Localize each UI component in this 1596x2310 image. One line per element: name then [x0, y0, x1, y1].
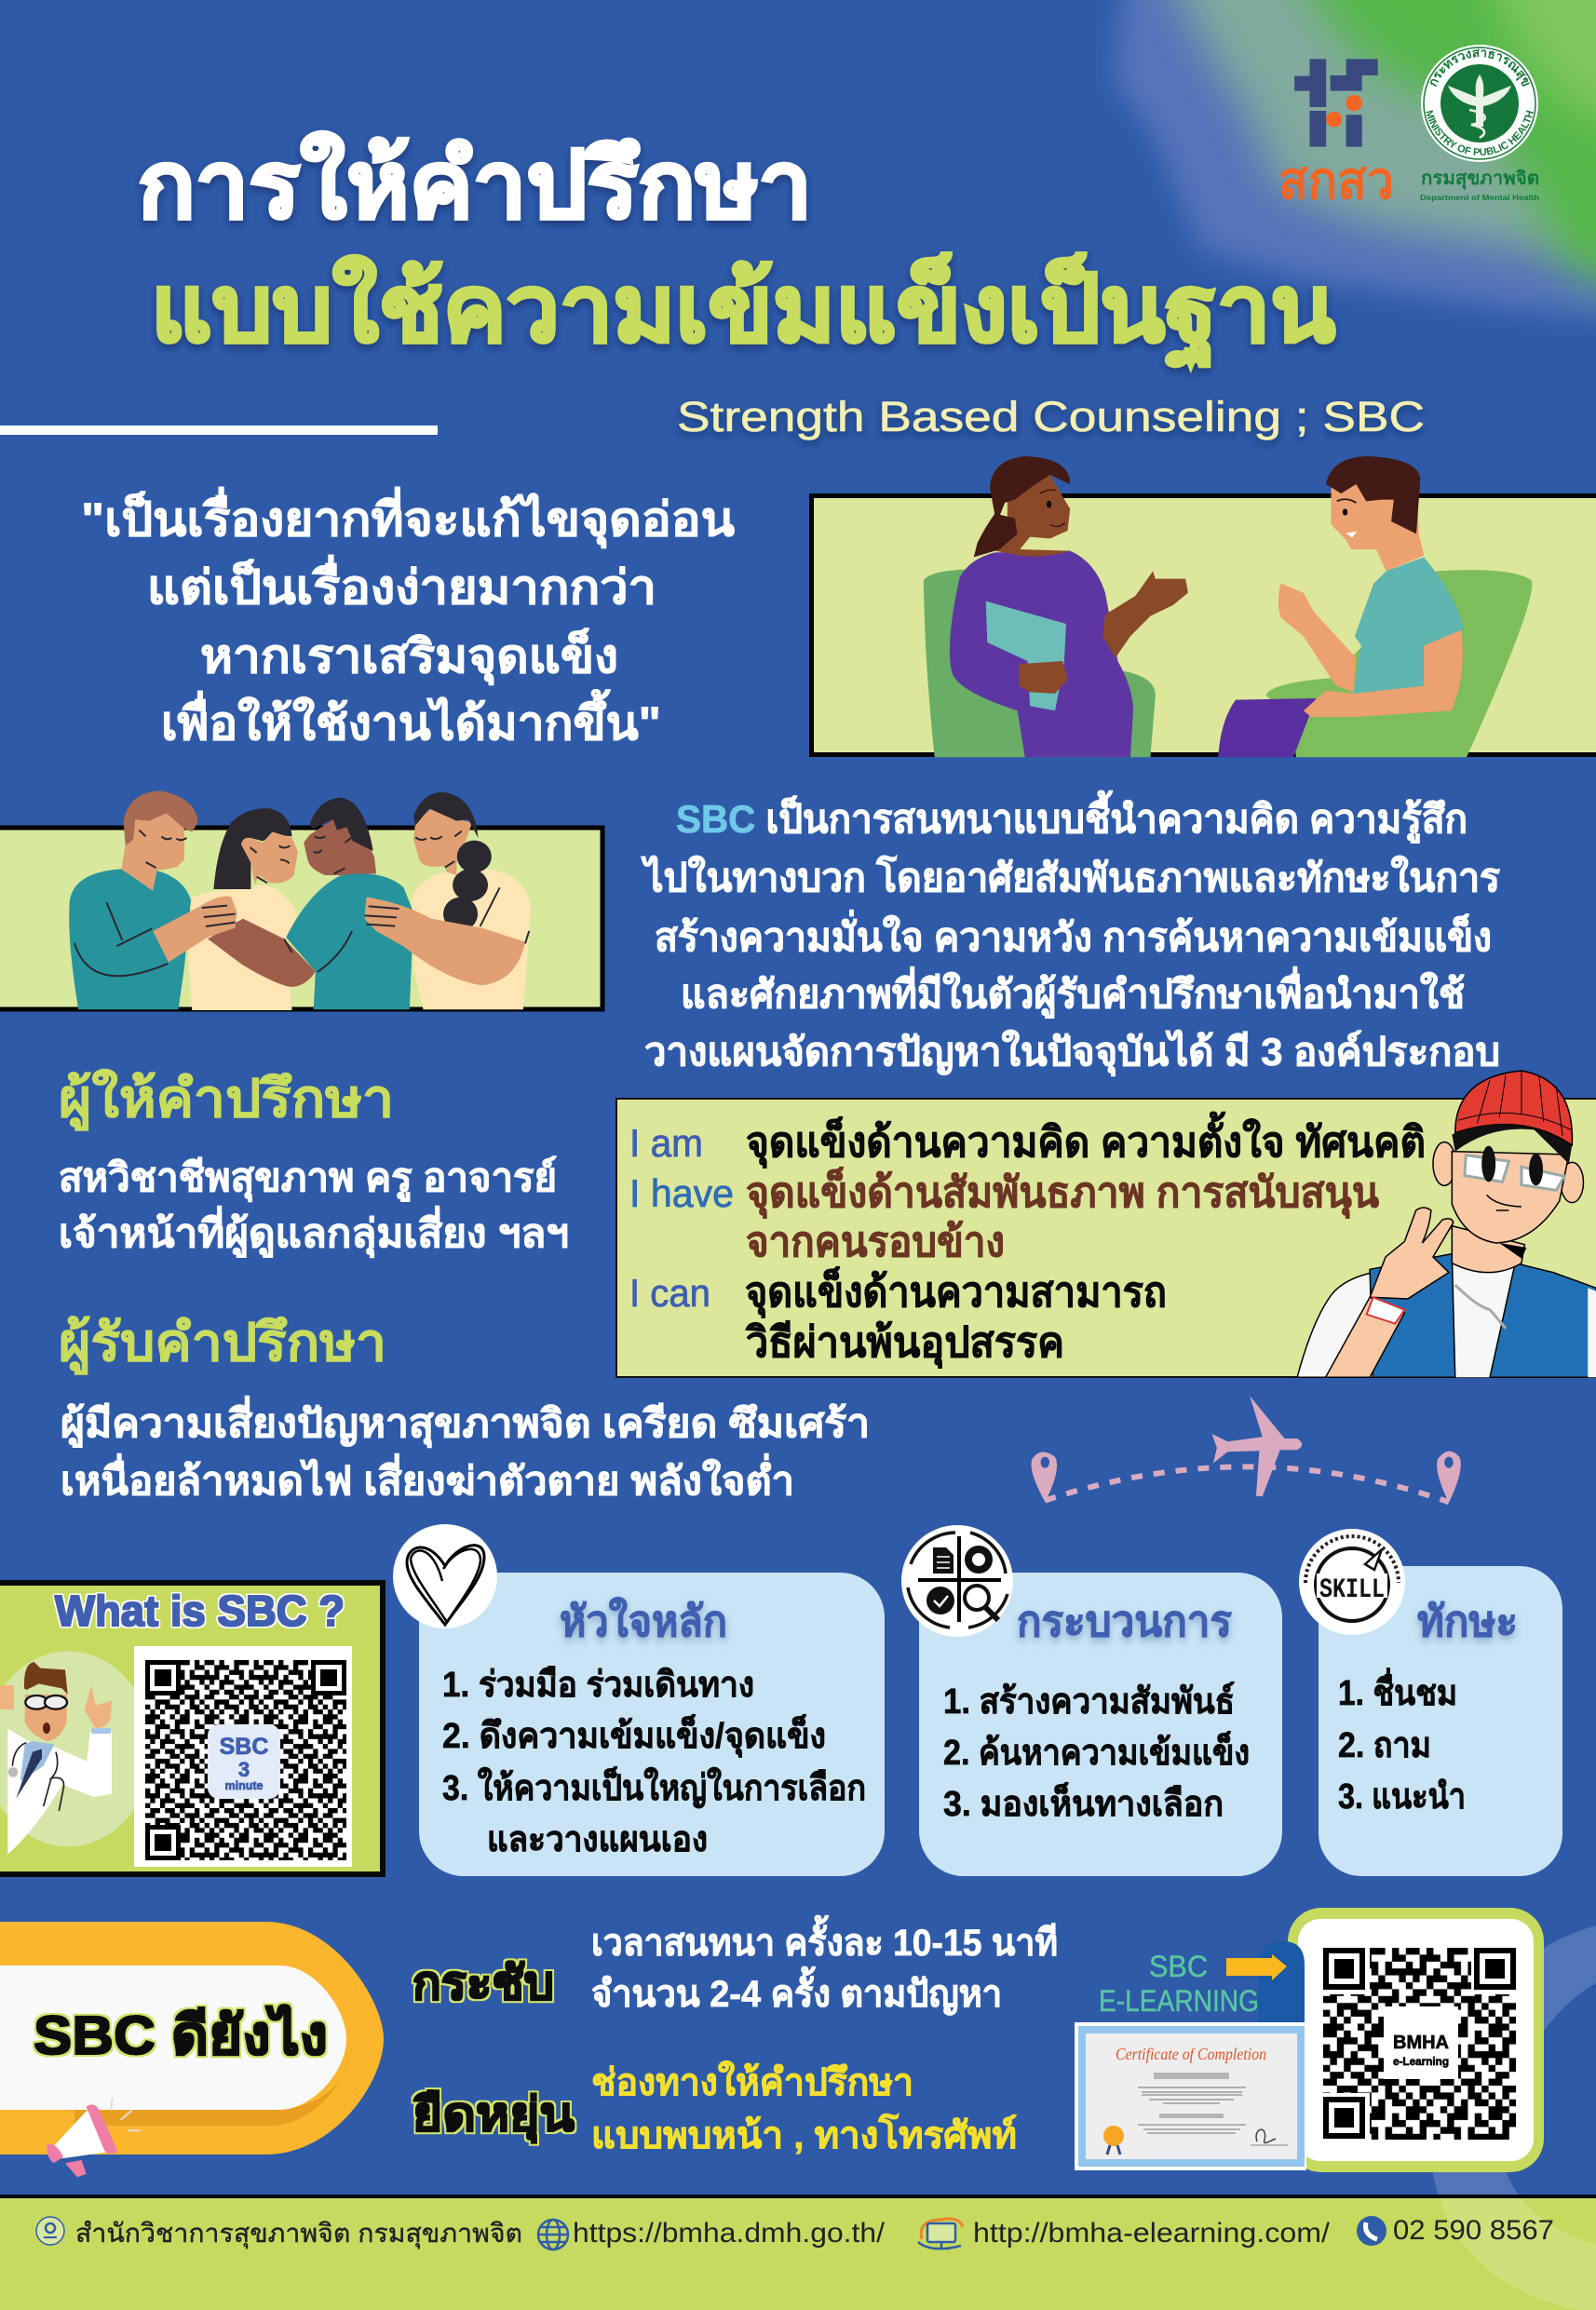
card: skills [1299, 1529, 1562, 1876]
QR code: SBC 3 minute: minute [225, 1779, 264, 1792]
SBC description: SBC เป็นการสนทนาแบบชี้นำความคิด ความรู้สึก [676, 790, 1468, 844]
footer band [0, 2196, 1596, 2310]
quote: "เป็นเรื่องยากที่จะแก้ไขจุดอ่อน [81, 487, 735, 548]
accent line [0, 426, 438, 435]
footer rule [0, 2195, 1596, 2198]
card: process: 2. ค้นหาความเข้มแข็ง [943, 1731, 1250, 1773]
flexible text: แบบพบหน้า , ทางโทรศัพท์ [591, 2114, 1017, 2156]
footer: address: สำนักวิชาการสุขภาพจิต กรมสุขภาพจิต [75, 2219, 522, 2249]
card: core: 3. ให้ความเป็นใหญ่ในการเลือก [442, 1766, 866, 1808]
card: core: หัวใจหลัก [560, 1596, 727, 1645]
panel: I am / I have / I can: จุดแข็งด้านความสามารถ [745, 1266, 1167, 1318]
quote: เพื่อให้ใช้งานได้มากขึ้น" [161, 689, 661, 750]
icon: phone [1357, 2216, 1386, 2246]
QR code: e-learning: BMHA [1393, 2033, 1449, 2053]
SBC description [641, 790, 1500, 1076]
certificate [1075, 2022, 1306, 2170]
logo text: department of mental health: กรมสุขภาพจิต [1421, 169, 1539, 190]
panel: I am / I have / I can: จุดแข็งด้านสัมพันธภาพ การสนับสนุน [746, 1167, 1379, 1219]
icon: skill [1299, 1529, 1405, 1635]
QR code: e-learning [1288, 1908, 1544, 2172]
plane route [1032, 1396, 1461, 1503]
decorative crescent lower right [1429, 1925, 1596, 2310]
QR code: e-learning: e-Learning [1393, 2055, 1449, 2068]
SBC description: ไปในทางบวก โดยอาศัยสัมพันธภาพและทักษะในการ [641, 855, 1500, 899]
counsellor heading: ผู้ให้คำปรึกษา [59, 1068, 394, 1131]
quote: แต่เป็นเรื่องง่ายมากกว่า [147, 555, 656, 614]
footer: phone: 02 590 8567 [1393, 2215, 1554, 2246]
client text: เหนื่อยล้าหมดไฟ เสี่ยงฆ่าตัวตาย พลังใจต่ำ [61, 1453, 794, 1503]
client text [61, 1396, 870, 1503]
card: process [901, 1525, 1282, 1876]
badge: SBC benefit [0, 1922, 384, 2177]
footer: website: https://bmha.dmh.go.th/ [573, 2218, 886, 2249]
label: flexible: ยืดหยุ่น [413, 2088, 575, 2143]
flexible text [591, 2060, 1017, 2156]
card: process: กระบวนการ [1017, 1597, 1232, 1645]
quote [81, 487, 735, 750]
SBC description: วางแผนจัดการปัญหาในปัจจุบันได้ มี 3 องค์ประกอบ [644, 1029, 1500, 1076]
panel: I am / I have / I can: I have [629, 1171, 734, 1215]
icon: globe [538, 2220, 568, 2249]
icon: location [36, 2217, 64, 2245]
badge: SBC benefit: SBC ดียังไง [34, 2005, 328, 2066]
counsellor text [59, 1155, 569, 1258]
panel: I am / I have / I can: วิธีผ่านพ้นอุปสรรค [745, 1318, 1064, 1369]
panel: what is SBC: What is SBC ? [55, 1587, 345, 1635]
certificate: Certificate of Completion [1116, 2045, 1266, 2063]
icon: megaphone [47, 2098, 141, 2177]
card: process: 1. สร้างความสัมพันธ์ [943, 1682, 1235, 1722]
QR code: SBC 3 minute: SBC [220, 1734, 268, 1760]
icon: monitor [918, 2219, 963, 2249]
logo text: department of mental health: Department of Mental Health [1420, 193, 1539, 202]
client text: ผู้มีความเสี่ยงปัญหาสุขภาพจิต เครียด ซึมเศร้า [61, 1396, 870, 1448]
panel: I am / I have / I can: I am [629, 1121, 703, 1165]
concise text: เวลาสนทนา ครั้งละ 10-15 นาที [591, 1915, 1058, 1964]
card: process: 3. มองเห็นทางเลือก [943, 1782, 1224, 1824]
logo: ministry seal [1421, 45, 1538, 162]
client heading: ผู้รับคำปรึกษา [59, 1313, 386, 1375]
panel: what is SBC [0, 1583, 383, 1874]
concise text: จำนวน 2-4 ครั้ง ตามปัญหา [591, 1966, 1002, 2016]
card: core: 2. ดึงความเข้มแข็ง/จุดแข็ง [442, 1714, 826, 1758]
logo: ministry seal: กระทรวงสาธารณสุข [1430, 48, 1530, 88]
logo: ministry seal: MINISTRY OF PUBLIC HEALTH [1426, 110, 1534, 155]
card: skills: 2. ถาม [1338, 1726, 1431, 1765]
panel: group hug illustration [0, 790, 602, 1010]
flexible text: ช่องทางให้คำปรึกษา [591, 2060, 913, 2103]
footer: e-learning site: http://bmha-elearning.com/ [973, 2218, 1331, 2249]
icon: heart [393, 1524, 497, 1628]
title line 1: การให้คำปรึกษา [138, 131, 812, 237]
doctor figure [0, 1651, 152, 1855]
character with red beanie [1297, 1071, 1596, 1377]
title line 2: แบบใช้ความเข้มแข็งเป็นฐาน [151, 252, 1335, 370]
card: skills: 1. ชื่นชม [1338, 1668, 1457, 1713]
QR code: SBC 3 minute [134, 1646, 352, 1867]
quote: หากเราเสริมจุดแข็ง [200, 628, 618, 685]
panel: I am / I have / I can [616, 1099, 1596, 1377]
logo: sakosowo [1278, 59, 1394, 209]
card: core: และวางแผนเอง [487, 1820, 708, 1859]
label: concise: กระชับ [413, 1957, 554, 2009]
counsellor text: สหวิชาชีพสุขภาพ ครู อาจารย์ [59, 1155, 557, 1202]
panel: I am / I have / I can: I can [629, 1271, 710, 1315]
arrow [1226, 1954, 1287, 1980]
logo: sakosowo: สกสว [1278, 151, 1394, 209]
e-learning tab: SBC [1149, 1950, 1208, 1983]
panel: counselling illustration [812, 456, 1596, 757]
counsellor text: เจ้าหน้าที่ผู้ดูแลกลุ่มเสี่ยง ฯลฯ [59, 1206, 569, 1258]
card: skills: 3. แนะนำ [1338, 1777, 1466, 1817]
card: skills: ทักษะ [1417, 1597, 1518, 1645]
logo text: department of mental health [1420, 169, 1539, 202]
subtitle: Strength Based Counseling ; SBC [677, 393, 1425, 440]
QR code: SBC 3 minute: 3 [238, 1758, 250, 1781]
concise text [591, 1915, 1058, 2016]
SBC description: และศักยภาพที่มีในตัวผู้รับคำปรึกษาเพื่อนำมาใช้ [681, 966, 1465, 1019]
card: core: 1. ร่วมมือ ร่วมเดินทาง [442, 1666, 754, 1705]
SBC description: สร้างความมั่นใจ ความหวัง การค้นหาความเข้มแข็ง [655, 910, 1492, 959]
e-learning tab [1099, 1941, 1305, 2022]
panel: I am / I have / I can: จุดแข็งด้านความคิด ความตั้งใจ ทัศนคติ [746, 1111, 1426, 1169]
panel: I am / I have / I can: จากคนรอบข้าง [746, 1218, 1005, 1265]
card: core [393, 1524, 885, 1876]
icon: process [901, 1525, 1013, 1637]
e-learning tab: E-LEARNING [1099, 1984, 1259, 2018]
icon: skill: SKILL [1319, 1574, 1385, 1606]
watercolor wash top right [1114, 0, 1596, 321]
